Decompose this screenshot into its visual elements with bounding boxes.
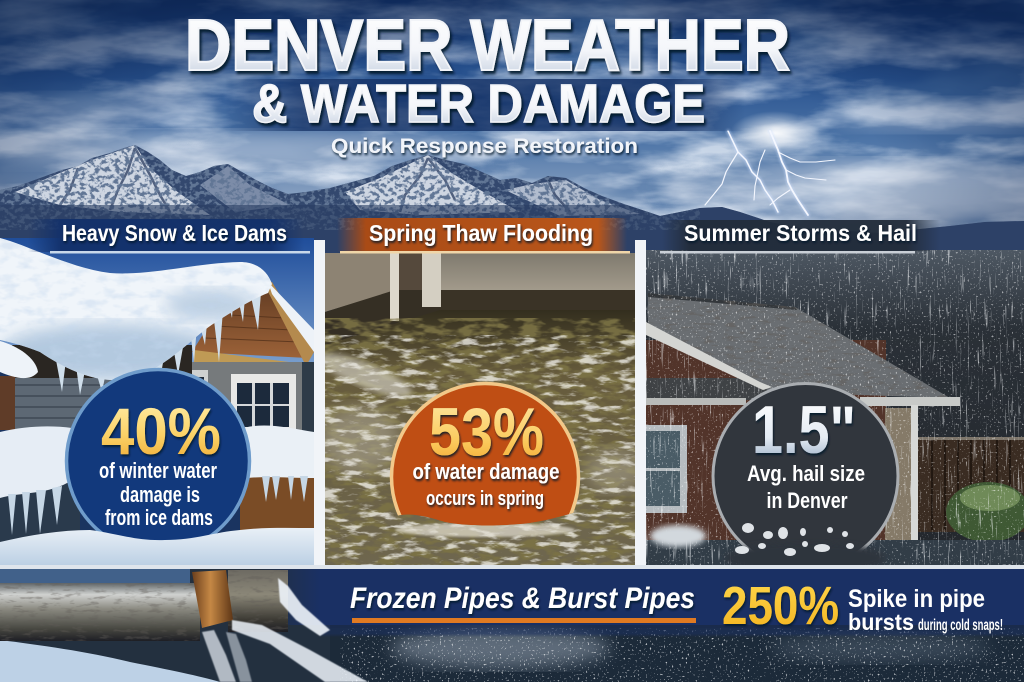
brick wall <box>646 340 886 545</box>
stat badge: 1.5 inches: in Denver <box>766 488 848 513</box>
stat badge: 53%: occurs in spring <box>426 488 544 510</box>
hail streaks <box>646 250 1024 566</box>
left background <box>0 569 330 682</box>
lightning bolt <box>705 111 835 215</box>
lower roof <box>646 378 776 400</box>
statistic: 250%: 250% <box>722 576 839 636</box>
main roof snow <box>0 238 275 388</box>
small roof snow <box>0 341 38 378</box>
title line one: DENVER WEATHER <box>185 6 790 86</box>
title line two: & WATER DAMAGE <box>252 74 705 134</box>
pipe <box>0 570 290 642</box>
main roof <box>648 293 950 398</box>
stat badge: 1.5 inches <box>713 384 898 574</box>
stat badge: 53%: 53% <box>429 394 544 470</box>
flood water <box>325 310 635 566</box>
panel: heavy snow and ice dams <box>0 219 314 565</box>
cabin gable <box>192 292 302 358</box>
icicles under roof <box>56 296 261 395</box>
panel: spring thaw flooding <box>314 218 645 570</box>
roof snow on gable edge <box>268 282 314 352</box>
log siding <box>15 378 112 429</box>
stat badge: 53% <box>387 382 580 538</box>
horizontal white rule <box>0 565 1024 569</box>
lower snow mounds <box>0 426 72 498</box>
foam over badge <box>387 512 576 565</box>
basement walls <box>441 253 635 290</box>
stormy tree line <box>646 250 1024 566</box>
snow bank <box>0 640 220 682</box>
header: spring thaw <box>337 218 630 254</box>
header: summer storms: Summer Storms & Hail <box>684 220 917 246</box>
header: spring thaw: Spring Thaw Flooding <box>369 220 593 246</box>
stat badge: 40%: damage is <box>120 482 200 507</box>
cabin wall and window <box>192 362 302 430</box>
ground haze over badge base <box>725 542 885 574</box>
statistic: 250%: bursts <box>848 609 914 635</box>
stat badge: 40% <box>0 370 314 565</box>
stat badge: 1.5 inches: Avg. hail size <box>747 461 865 486</box>
dark water surface <box>330 628 1024 682</box>
statistic: 250%: Spike in pipe <box>848 585 985 613</box>
winter sky <box>0 238 314 368</box>
lower icicles <box>8 476 308 535</box>
stat badge: 40%: of winter water <box>99 458 217 483</box>
navy band <box>320 569 1024 625</box>
gutter <box>646 398 746 405</box>
title <box>185 6 790 158</box>
bottom band: frozen and burst pipes <box>0 565 1024 682</box>
house window <box>646 425 687 513</box>
sky background <box>0 0 1024 230</box>
mountain range <box>0 140 1024 260</box>
downspout <box>911 405 918 540</box>
wooden fence <box>918 437 1024 532</box>
stat badge: 40%: 40% <box>101 394 221 468</box>
water jets <box>202 578 368 682</box>
title band <box>225 79 745 131</box>
ground snow <box>0 528 314 565</box>
lower dark wall <box>0 480 80 542</box>
stat badge: 40%: from ice dams <box>105 505 213 530</box>
hail stones <box>735 523 854 556</box>
shrub <box>946 482 1024 542</box>
header: heavy snow <box>28 219 310 254</box>
vertical panel dividers <box>314 240 646 566</box>
statistic: 250% <box>722 576 1003 636</box>
header: summer storms <box>660 220 940 254</box>
header: heavy snow: Heavy Snow & Ice Dams <box>62 220 287 246</box>
stat badge: 1.5 inches: 1.5" <box>752 392 856 468</box>
bottom heading: Frozen Pipes & Burst Pipes <box>350 582 695 615</box>
siding <box>885 408 911 540</box>
panel: summer storms and hail <box>646 220 1024 574</box>
support posts <box>390 253 399 321</box>
wet driveway <box>646 540 1024 566</box>
brick pillar <box>0 376 15 430</box>
hail heap <box>650 525 706 547</box>
subtitle: Quick Response Restoration <box>331 135 638 158</box>
stat badge: 53%: of water damage <box>412 459 560 484</box>
